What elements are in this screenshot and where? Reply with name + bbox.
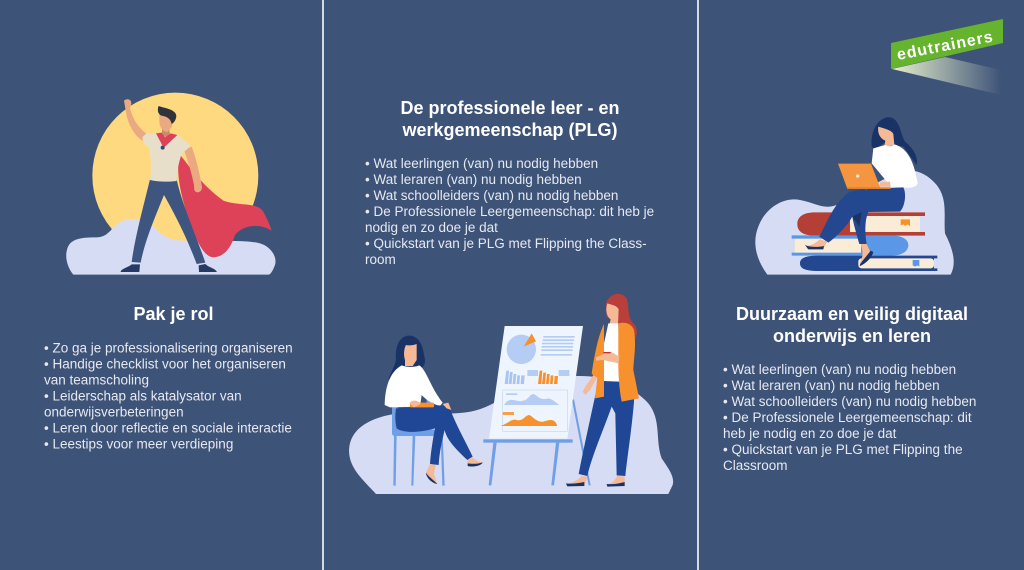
column 2: list: • Wat schoolleiders (van) nu nodig hebben: [365, 188, 618, 203]
column 3: heading: [736, 304, 968, 346]
logo wordmark: edutrainers: [896, 29, 995, 64]
standing woman: [566, 294, 639, 487]
illustration: woman with laptop on stack of books: [755, 117, 954, 275]
logo: edutrainers: [891, 19, 1003, 95]
chair: [392, 387, 445, 486]
column 2: heading: De professionele leer - en: [400, 98, 620, 118]
column 1: list: van teamscholing: [44, 372, 149, 388]
column 3: list: heb je nodig en zo doe je dat: [723, 426, 897, 441]
column 3: list: • Wat schoolleiders (van) nu nodig hebben: [723, 394, 976, 409]
illustration: presenter at flip chart and seated woman: [349, 294, 673, 494]
column 1: list: • Leestips voor meer verdieping: [44, 436, 233, 452]
column 3: list: • De Professionele Leergemeenschap: dit: [723, 410, 972, 425]
column 2: list: • Wat leerlingen (van) nu nodig hebben: [365, 156, 598, 171]
blob background: [349, 376, 673, 494]
column 2: list: nodig en zo doe je dat: [365, 220, 498, 235]
column 3: list: [723, 362, 976, 473]
column 1: list: [44, 340, 293, 452]
column 1: list: onderwijsverbeteringen: [44, 404, 184, 420]
column 1: list: • Leiderschap als katalysator van: [44, 388, 242, 404]
column 2: list: • Wat leraren (van) nu nodig hebben: [365, 172, 582, 187]
column 3: list: • Wat leraren (van) nu nodig hebben: [723, 378, 940, 393]
logo light beam: [892, 57, 1001, 95]
column 3: heading: onderwijs en leren: [773, 326, 931, 346]
seated woman: [385, 336, 483, 484]
column 2: list: • Quickstart van je PLG met Flipping the Class-: [365, 236, 647, 251]
column 2: heading: werkgemeenschap (PLG): [401, 120, 618, 140]
blob background: [755, 171, 954, 275]
column 3: list: Classroom: [723, 458, 788, 473]
column 1: list: • Zo ga je professionalisering organiseren: [44, 340, 293, 356]
book stack: [792, 212, 937, 271]
column 2: list: [365, 156, 654, 267]
column 2: list: room: [365, 252, 396, 267]
easel: [483, 399, 591, 485]
illustration: superhero with cape: [66, 93, 275, 275]
column 3: heading: Duurzaam en veilig digitaal: [736, 304, 968, 324]
column 2: heading: [400, 98, 620, 140]
column 1: heading: Pak je rol: [133, 304, 214, 324]
logo green banner: [891, 19, 1003, 69]
column 3: list: • Quickstart van je PLG met Flipping the: [723, 442, 963, 457]
column 3: list: • Wat leerlingen (van) nu nodig hebben: [723, 362, 956, 377]
woman: [805, 117, 918, 266]
flip chart: [489, 326, 583, 439]
column 2: list: • De Professionele Leergemeenschap: dit heb je: [365, 204, 654, 219]
column 1: list: • Handige checklist voor het organiseren: [44, 356, 286, 372]
column 1: list: • Leren door reflectie en sociale interactie: [44, 420, 292, 436]
